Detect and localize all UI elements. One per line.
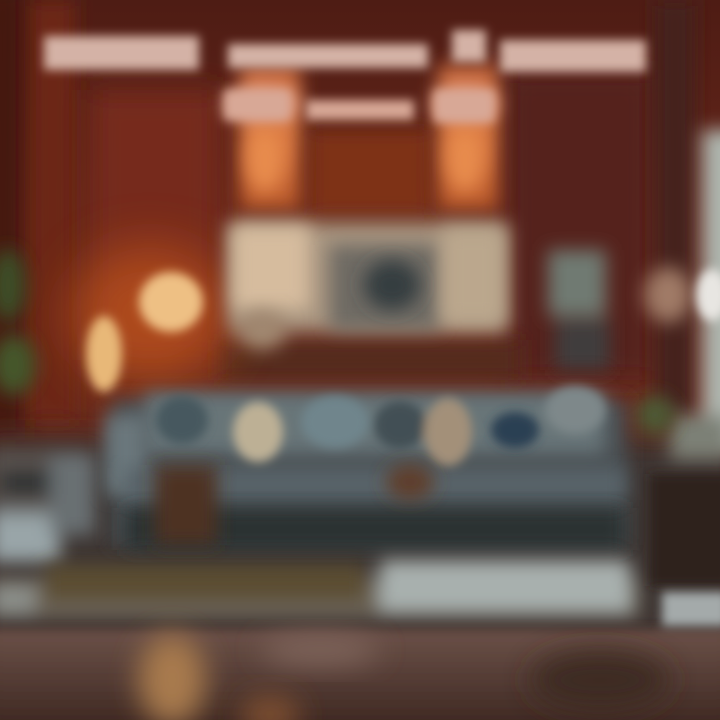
pendant lamp: left: [224, 65, 300, 210]
plant at right: [635, 395, 675, 435]
lower room shadow: [0, 440, 720, 640]
title: first line, blurred: [44, 30, 646, 72]
title: second line, blurred: [224, 90, 494, 122]
plant at left: [0, 249, 36, 395]
sofa: [105, 386, 627, 550]
wall art panel: [228, 222, 508, 350]
sofa cushions: [156, 386, 605, 466]
side chair at left: [0, 450, 95, 562]
wall glow behind table lamps: [70, 245, 230, 385]
framed picture at right: [548, 250, 610, 370]
rug: [0, 560, 640, 618]
window at right: [670, 130, 720, 460]
table lamp: upper: [139, 272, 203, 332]
items on coffee table: [386, 464, 434, 500]
pendant lamp: right: [431, 65, 499, 210]
armchair at right: [650, 474, 720, 626]
wall sconce at right: [644, 267, 692, 323]
side table at left of sofa: [155, 465, 217, 545]
table lamp: lower: [86, 316, 122, 392]
floor: [0, 630, 720, 720]
